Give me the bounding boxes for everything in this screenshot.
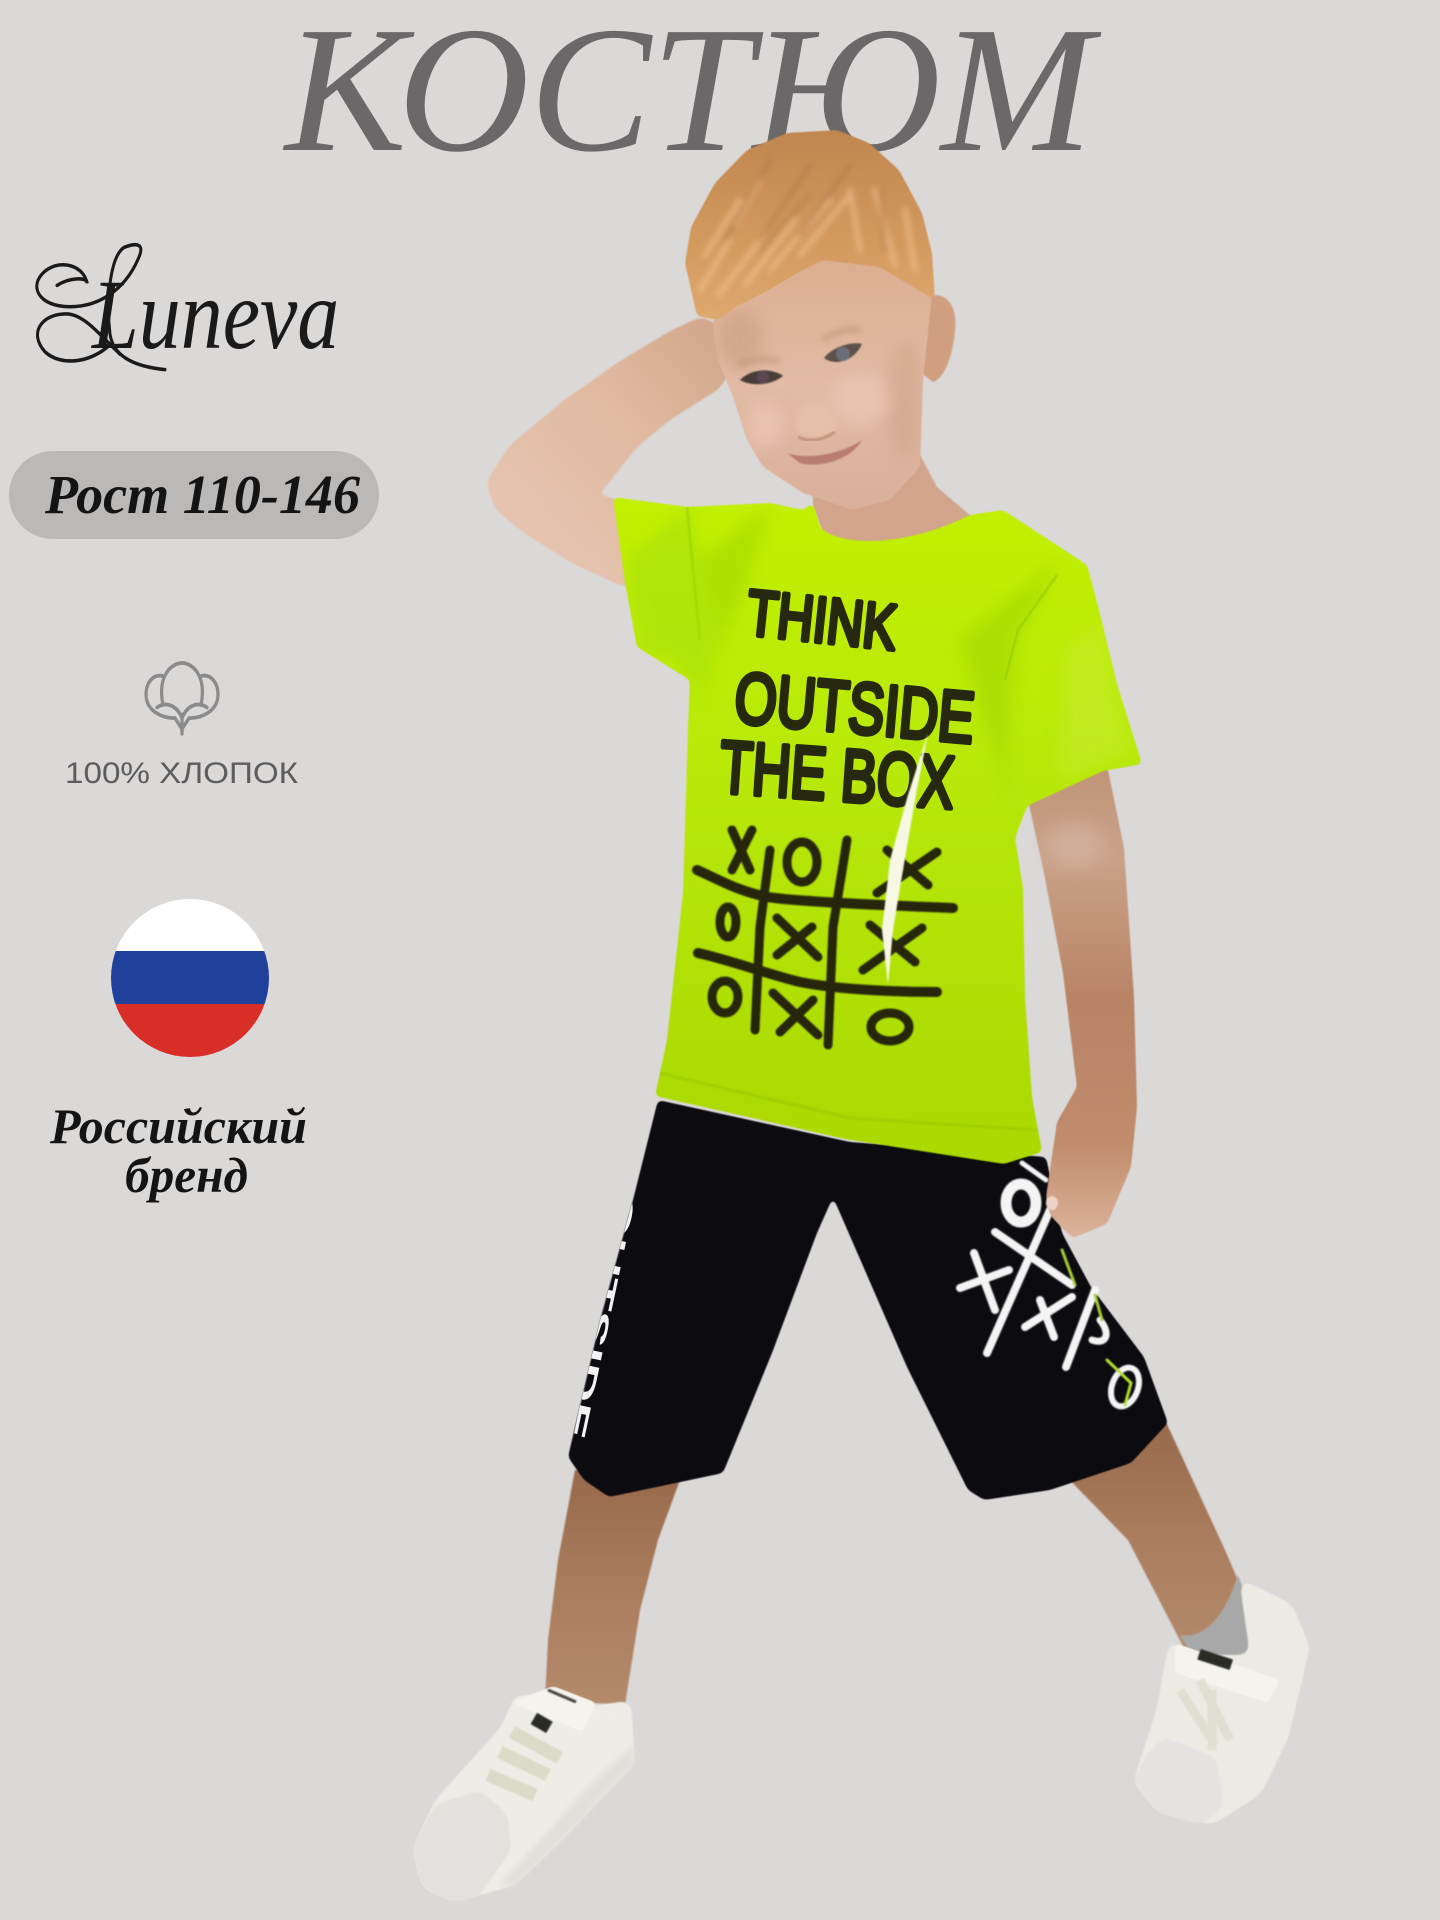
arm highlight bbox=[1045, 823, 1105, 867]
t-shirt bbox=[613, 497, 1142, 1164]
white paint streak bbox=[882, 733, 928, 985]
brand caption: бренд bbox=[125, 1147, 248, 1203]
raised arm bbox=[486, 316, 742, 590]
cotton badge bbox=[65, 663, 299, 790]
logo: Luneva: Luneva bbox=[90, 259, 339, 370]
right eye bbox=[824, 343, 862, 362]
shorts side print: OUTSIDE bbox=[559, 1191, 641, 1442]
brand caption bbox=[49, 1098, 307, 1203]
eyebrow shadows bbox=[738, 330, 860, 365]
shirt slogan: OUTSIDE bbox=[732, 658, 978, 759]
left shoe bbox=[412, 1686, 635, 1902]
shorts bbox=[559, 1100, 1168, 1500]
photo: boy in costume bbox=[412, 130, 1310, 1902]
shirt slogan: THINK bbox=[744, 576, 900, 664]
mouth bbox=[787, 440, 862, 465]
right leg bbox=[1060, 1420, 1240, 1650]
left eye bbox=[740, 370, 783, 384]
hair bbox=[685, 130, 935, 320]
shirt tic-tac-toe grid bbox=[697, 830, 953, 1045]
cheek shading bbox=[718, 310, 762, 370]
face bbox=[712, 258, 932, 510]
cotton label: 100% ХЛОПОК bbox=[65, 757, 299, 790]
height badge: Рост 110-146 bbox=[44, 464, 360, 525]
right arm bbox=[1028, 765, 1137, 1238]
ear bbox=[920, 295, 955, 382]
height badge bbox=[9, 451, 379, 539]
neck bbox=[813, 455, 972, 543]
fingernail bbox=[1046, 1196, 1058, 1210]
icon: russian flag bbox=[111, 899, 269, 1057]
icon: cotton bbox=[146, 663, 218, 734]
left leg bbox=[545, 1470, 680, 1705]
shorts tic-tac-toe print bbox=[960, 1163, 1144, 1410]
sock bbox=[1180, 1575, 1262, 1658]
hair strands bbox=[700, 160, 915, 295]
shirt slogan: THE BOX bbox=[717, 725, 957, 824]
sleeve folds bbox=[625, 505, 720, 700]
shirt slogan bbox=[717, 576, 978, 824]
right shoe bbox=[1133, 1578, 1310, 1825]
nose bbox=[794, 401, 837, 438]
brand caption: Российский bbox=[49, 1098, 307, 1154]
